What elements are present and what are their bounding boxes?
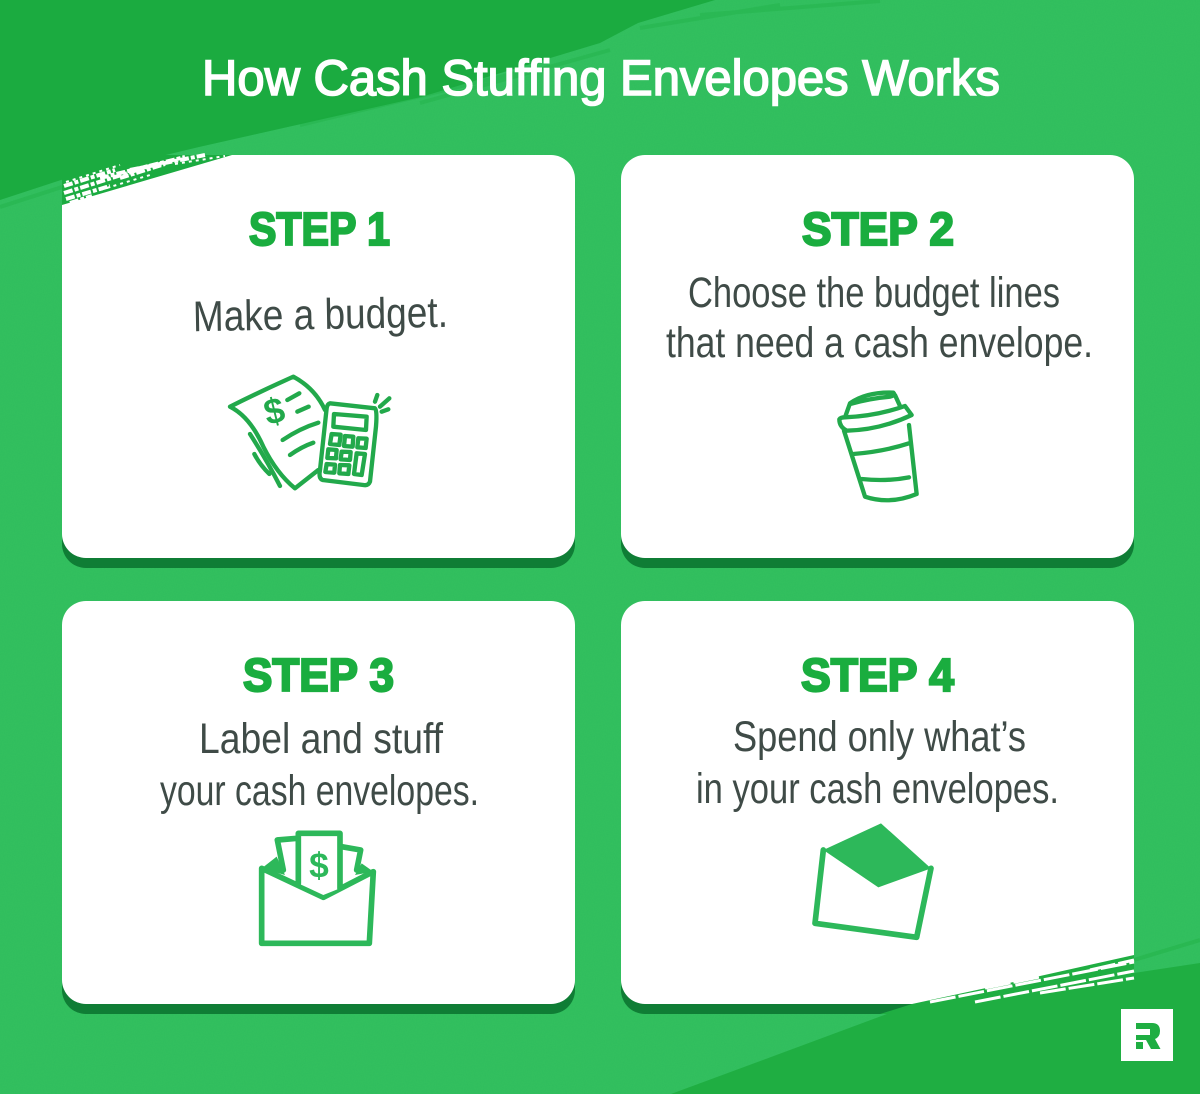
heading: step 4: STEP 4 — [801, 649, 954, 701]
title: How Cash Stuffing Envelopes Works — [202, 50, 1000, 106]
panel: step 4 — [621, 601, 1134, 1014]
text: step 4 — [696, 713, 1059, 813]
panel: step 3 — [62, 601, 575, 1014]
heading: step 1: STEP 1 — [249, 203, 390, 255]
text: step 3 — [160, 715, 479, 815]
icon: bill and calculator: $ — [260, 388, 289, 433]
brush over card corner — [880, 955, 1134, 1014]
heading: step 2: STEP 2 — [802, 203, 954, 255]
text: step 3: Label and stuff — [199, 715, 444, 763]
text: step 2 — [666, 269, 1093, 367]
logo — [1121, 1009, 1173, 1061]
text: step 2: Choose the budget lines — [688, 269, 1060, 317]
icon: coffee cup — [839, 393, 917, 500]
panel: step 2 — [621, 155, 1134, 568]
text: step 4: in your cash envelopes. — [696, 765, 1059, 813]
icon: envelope with cash — [262, 833, 373, 943]
brush stroke: top left — [0, 0, 880, 207]
text: step 4: Spend only what’s — [733, 713, 1026, 761]
brush stroke: bottom right — [671, 940, 1200, 1094]
icon: bill and calculator — [230, 377, 389, 488]
text: step 3: your cash envelopes. — [160, 767, 479, 815]
text: step 1: Make a budget. — [193, 289, 448, 341]
icon: envelope with cash: $ — [309, 846, 329, 885]
heading: step 3: STEP 3 — [243, 649, 394, 701]
brush over card corner — [62, 155, 232, 205]
icon: open envelope — [815, 823, 931, 937]
panel: step 1 — [62, 155, 575, 568]
text: step 2: that need a cash envelope. — [666, 319, 1093, 367]
